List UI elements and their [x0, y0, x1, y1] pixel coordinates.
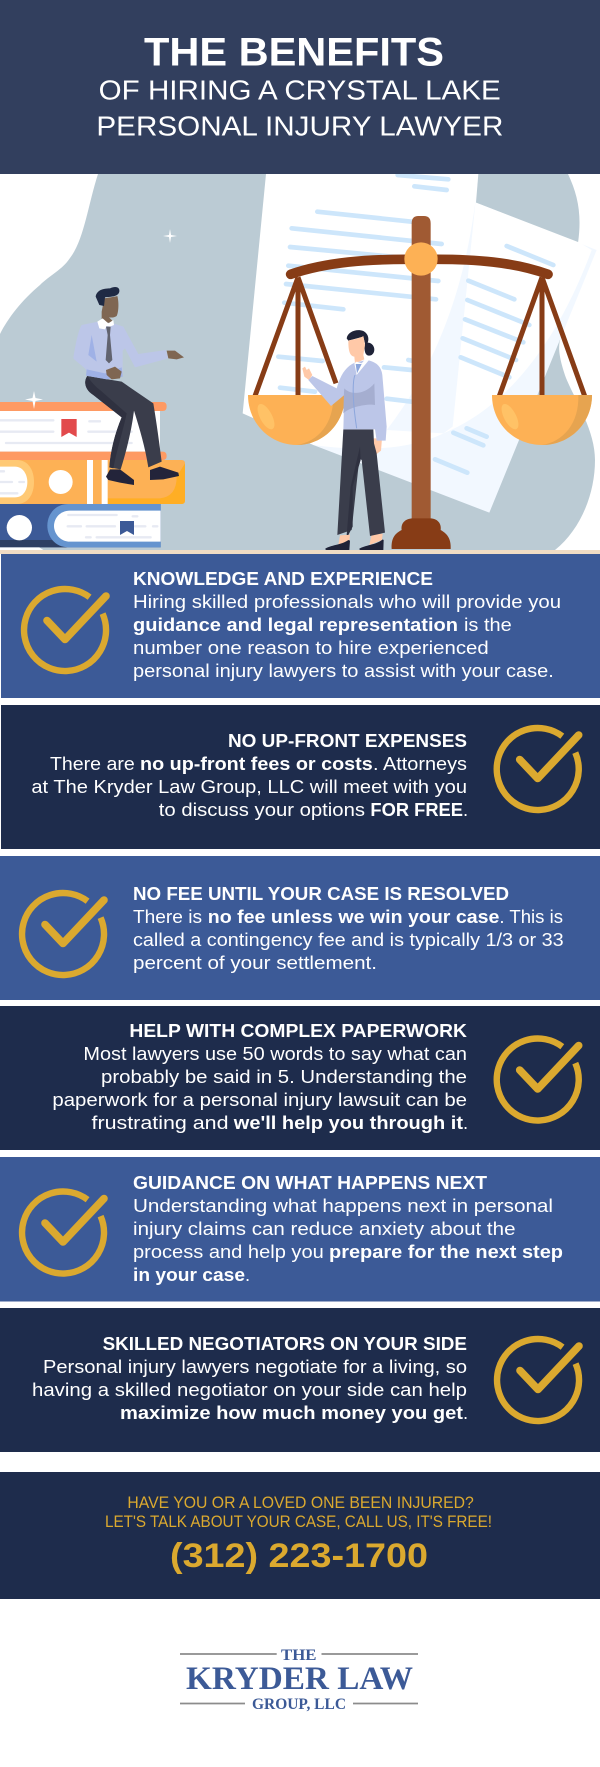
left chains: [255, 277, 336, 396]
man tie: [106, 327, 112, 363]
man collar: [97, 318, 114, 329]
call to action text: HAVE YOU OR A LOVED ONE BEEN INJURED?: [127, 1494, 474, 1512]
man legs: [85, 376, 179, 485]
pole: [412, 216, 431, 523]
floor strip: [0, 550, 600, 554]
body text: .: [463, 1402, 468, 1423]
left bowl: [248, 395, 345, 445]
logo text: GROUP, LLC: [252, 1696, 346, 1713]
body text: Hiring skilled professionals who will provide you: [133, 591, 561, 612]
illustration: lawyers with scales of justice: [0, 174, 600, 554]
icon: check circle: [22, 893, 104, 975]
woman shoes: [325, 539, 384, 550]
body text: [31, 753, 468, 820]
body text: Understanding what happens next in personal: [133, 1195, 553, 1216]
logo rules: [180, 1654, 418, 1704]
heading: KNOWLEDGE AND EXPERIENCE: [133, 568, 433, 589]
body text: [32, 1356, 468, 1423]
body text: no fee unless we win your case: [208, 906, 499, 927]
man sitting on books: [73, 287, 184, 485]
body text: There is: [133, 906, 202, 927]
body text: called a contingency fee and is typically 1/3 or 33: [133, 929, 564, 950]
paper text lines: [278, 175, 553, 473]
body text: .: [463, 1112, 468, 1133]
woman feet: [338, 534, 383, 545]
body text: . This is: [499, 906, 563, 927]
pivot: [404, 242, 438, 276]
body text: having a skilled negotiator on your side can help: [32, 1379, 467, 1400]
header panel: [0, 0, 600, 174]
icon: check circle: [22, 1192, 104, 1274]
icon: check circle: [497, 1339, 579, 1421]
man hair: [96, 287, 119, 306]
body text: probably be said in 5. Understanding the: [101, 1066, 467, 1087]
heading: NO UP-FRONT EXPENSES: [228, 730, 467, 751]
body text: at The Kryder Law Group, LLC will meet with you: [31, 776, 467, 797]
right bowl: [492, 395, 592, 445]
body text: [52, 1043, 468, 1133]
body text: personal injury lawyers to assist with your case.: [133, 660, 554, 681]
heading: HELP WITH COMPLEX PAPERWORK: [129, 1020, 468, 1041]
body text: no up-front fees or costs: [140, 753, 373, 774]
logo text: THE: [281, 1647, 316, 1664]
body text: [133, 1195, 563, 1285]
man shirt: [73, 322, 168, 379]
woman face: [348, 336, 365, 363]
heading: SKILLED NEGOTIATORS ON YOUR SIDE: [103, 1333, 467, 1354]
panel: no fee until resolved: [0, 856, 600, 1000]
body text: . Attorneys: [373, 753, 467, 774]
body text: FOR FREE: [370, 799, 463, 820]
man face: [102, 296, 118, 326]
body text: we'll help you through it: [233, 1112, 463, 1133]
paper back: [313, 203, 597, 513]
subtitle line 2: PERSONAL INJURY LAWYER: [96, 110, 503, 142]
paper front: [243, 174, 592, 449]
body text: .: [245, 1264, 250, 1285]
icon: sparkle upper: [163, 229, 177, 243]
panel: guidance on what happens next: [0, 1157, 600, 1302]
heading: NO FEE UNTIL YOUR CASE IS RESOLVED: [133, 883, 509, 904]
man shoes: [106, 467, 179, 485]
logo text: KRYDER LAW: [186, 1661, 413, 1697]
body text: frustrating and: [92, 1112, 228, 1133]
body text: .: [463, 799, 468, 820]
woman upper body: [302, 330, 387, 441]
body text: [133, 906, 564, 973]
icon: check circle: [497, 728, 579, 810]
base: [392, 518, 451, 549]
subtitle line 1: OF HIRING A CRYSTAL LAKE: [99, 74, 501, 106]
phone number: (312) 223-1700: [170, 1537, 428, 1575]
woman collar: [354, 357, 369, 375]
man hands: [106, 351, 184, 379]
title: THE BENEFITS: [144, 30, 444, 74]
body text: prepare for the next step: [329, 1241, 563, 1262]
call to action text: [105, 1494, 492, 1531]
background blob: [0, 174, 595, 550]
woman hand at side: [373, 438, 382, 454]
icon: sparkle on books: [25, 391, 43, 409]
call to action text: LET'S TALK ABOUT YOUR CASE, CALL US, IT'S FREE!: [105, 1513, 492, 1531]
logo: [180, 1647, 418, 1713]
stack of books: [0, 402, 185, 550]
call to action panel: [0, 1472, 600, 1599]
man trousers: [85, 376, 162, 469]
papers and text lines: [243, 174, 597, 513]
body text: [133, 591, 561, 681]
body text: There are: [50, 753, 135, 774]
body text: Personal injury lawyers negotiate for a living, so: [43, 1356, 467, 1377]
woman jacket: [308, 360, 387, 441]
body text: to discuss your options: [159, 799, 365, 820]
body text: injury claims can reduce anxiety about the: [133, 1218, 516, 1239]
woman trousers: [337, 429, 385, 536]
body text: process and help you: [133, 1241, 324, 1262]
logo text: [186, 1647, 413, 1713]
body text: is the: [464, 614, 512, 635]
body text: maximize how much money you get: [120, 1402, 463, 1423]
top book: [0, 402, 167, 460]
woman lower body: [325, 429, 385, 550]
right chains: [499, 277, 585, 396]
woman: [302, 330, 387, 550]
body text: number one reason to hire experienced: [133, 637, 489, 658]
woman raised hand: [302, 367, 312, 380]
body text: percent of your settlement.: [133, 952, 377, 973]
paper shading: [387, 174, 478, 433]
body text: in your case: [133, 1264, 245, 1285]
icon: check circle: [24, 589, 106, 671]
panel: knowledge and experience: [1, 554, 600, 698]
panel: no up-front expenses: [1, 705, 600, 849]
body text: guidance and legal representation: [133, 614, 458, 635]
body text: paperwork for a personal injury lawsuit can be: [52, 1089, 467, 1110]
heading: GUIDANCE ON WHAT HAPPENS NEXT: [133, 1172, 488, 1193]
scales of justice: [248, 216, 592, 549]
icon: check circle: [497, 1039, 579, 1121]
panel: skilled negotiators: [0, 1308, 600, 1452]
body text: Most lawyers use 50 words to say what can: [83, 1043, 467, 1064]
man upper body: [73, 287, 184, 379]
bottom book: [0, 504, 161, 550]
beam: [291, 259, 548, 274]
woman hair: [347, 330, 374, 356]
panel: complex paperwork: [0, 1006, 600, 1150]
middle book: [0, 460, 185, 504]
